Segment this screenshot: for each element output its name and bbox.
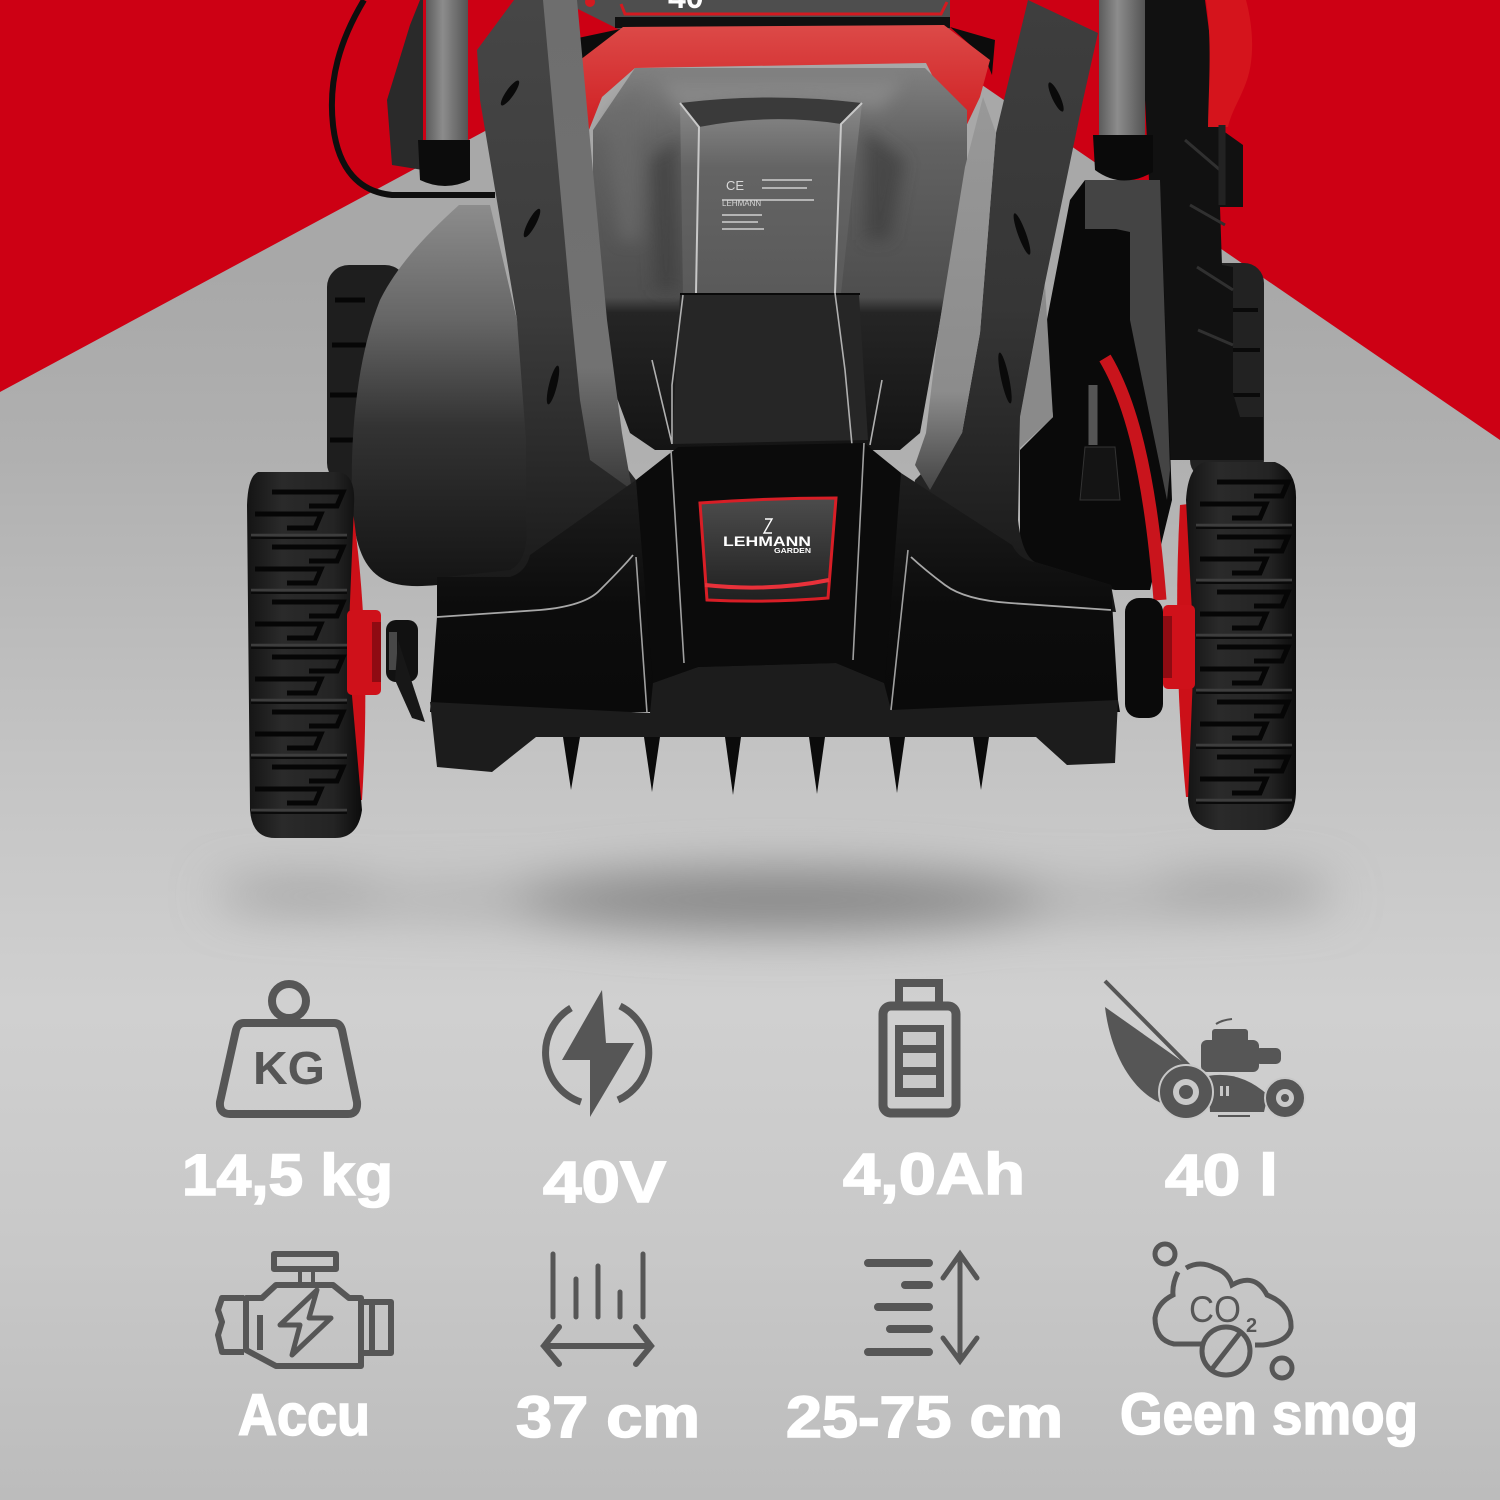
red hopper band — [580, 25, 990, 135]
rating label on cover: CE — [726, 178, 744, 193]
label: bag volume: 40 l — [1165, 1143, 1278, 1208]
right frame light strip — [915, 97, 996, 490]
hopper mount shadows — [578, 27, 995, 75]
label: emissions: Geen smog — [1120, 1382, 1418, 1447]
lower cover section — [652, 293, 882, 445]
centre column on cover — [680, 98, 862, 293]
left frame light strip — [543, 0, 632, 490]
grass bag ribs right — [1140, 0, 1263, 460]
background gap right — [1020, 285, 1053, 448]
icon: lawn mower — [1105, 981, 1305, 1119]
ground shadow — [215, 870, 1340, 930]
power cable — [332, 0, 495, 195]
icon: no CO2 cloud — [1155, 1244, 1292, 1378]
red lever — [1206, 0, 1252, 205]
right cavity — [1020, 180, 1172, 600]
label: voltage: 40V — [543, 1150, 666, 1215]
cover reflection — [605, 80, 905, 290]
front right wheel — [1163, 462, 1296, 830]
label: capacity: 4,0Ah — [843, 1142, 1025, 1207]
label: cutting height: 25-75 cm — [786, 1385, 1063, 1450]
rear right wheel — [1190, 263, 1264, 480]
label: weight: 14,5 kg — [182, 1143, 393, 1208]
icon: weight — [220, 984, 357, 1114]
icon: no CO2 cloud: CO — [1189, 1289, 1241, 1330]
handle tube left — [387, 0, 470, 186]
brand sub name: GARDEN — [774, 548, 811, 555]
rating label on cover: LEHMANN — [722, 199, 761, 208]
top label — [549, 0, 950, 30]
right frame — [895, 0, 1116, 612]
rear left wheel — [327, 265, 407, 485]
icon: power bolt — [546, 990, 649, 1117]
deck centre panel — [636, 443, 908, 713]
brand name: LEHMANN — [723, 534, 811, 549]
comb spikes — [563, 737, 989, 795]
deck lower skirt — [430, 663, 1118, 772]
handle tube right — [1093, 0, 1153, 181]
right axle — [1125, 598, 1163, 718]
icon: electric engine — [218, 1254, 391, 1366]
logo plate — [700, 498, 836, 601]
lawn mower rear view — [247, 0, 1296, 838]
icon: no CO2 cloud: 2 — [1246, 1315, 1257, 1337]
left side cover — [352, 205, 540, 586]
icon: battery — [883, 983, 956, 1113]
icon: weight: KG — [253, 1042, 325, 1094]
icon: cutting height — [868, 1254, 977, 1361]
icon: cutting width — [544, 1254, 651, 1364]
mower deck — [430, 447, 1120, 712]
front left wheel — [247, 472, 381, 838]
battery cover translucent — [593, 68, 967, 450]
brand mark — [764, 519, 772, 533]
left frame — [437, 0, 636, 612]
rating label on cover — [722, 178, 814, 229]
left axle — [386, 620, 425, 722]
label: power source: Accu — [238, 1383, 370, 1448]
label: cutting width: 37 cm — [516, 1385, 700, 1450]
